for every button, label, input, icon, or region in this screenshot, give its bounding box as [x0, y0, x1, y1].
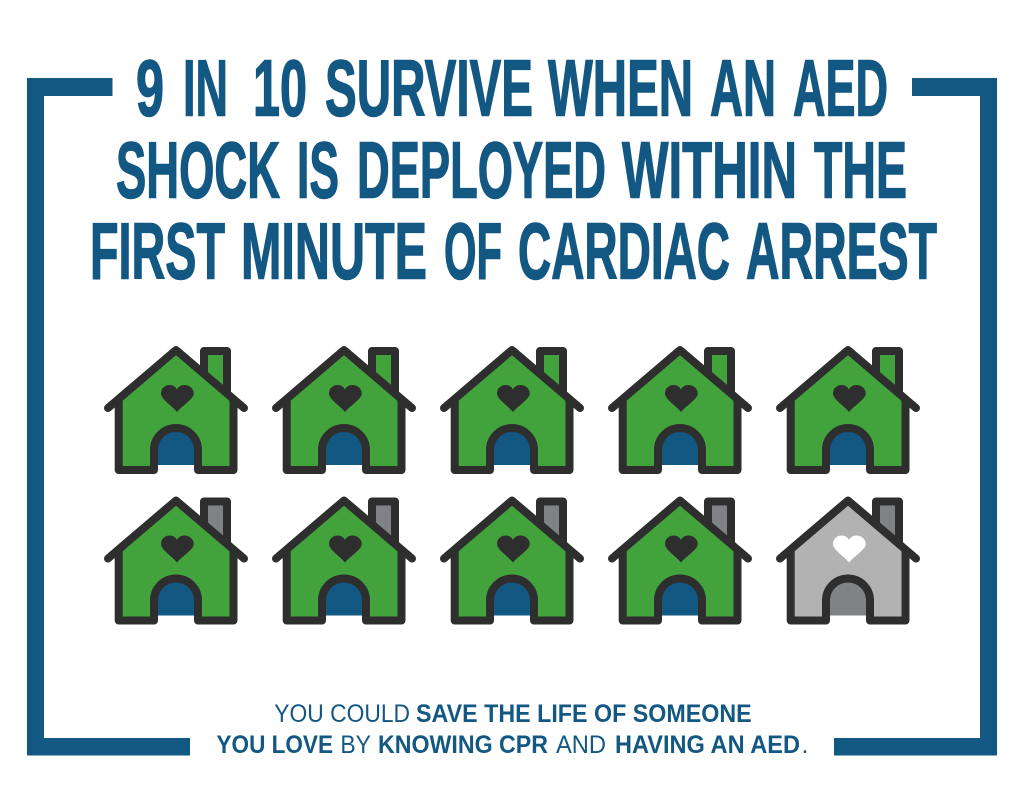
- title: DEPLOYED: [357, 126, 606, 214]
- title: IN: [183, 44, 228, 132]
- title: THE: [814, 126, 907, 214]
- house 8: survivor with gray chimney: [444, 500, 580, 620]
- footer message: BY: [340, 731, 371, 759]
- house 6: survivor with gray chimney: [108, 500, 244, 620]
- title: AED: [793, 44, 888, 132]
- title: SHOCK: [116, 126, 280, 214]
- house 3: survivor: [444, 350, 580, 470]
- title: OF: [444, 206, 502, 296]
- house 4: survivor: [612, 350, 748, 470]
- title: 9: [136, 44, 164, 132]
- footer message: YOU LOVE: [216, 731, 333, 759]
- footer message: AND: [556, 731, 606, 759]
- footer message: .: [802, 731, 808, 759]
- house 7: survivor with gray chimney: [276, 500, 412, 620]
- house 2: survivor: [276, 350, 412, 470]
- title: SURVIVE: [325, 44, 533, 132]
- footer message: HAVING AN AED: [615, 731, 800, 759]
- title: WHEN: [548, 44, 693, 132]
- footer message: KNOWING CPR: [378, 731, 548, 759]
- title: [90, 44, 937, 296]
- title: WITHIN: [622, 126, 797, 214]
- title: AN: [710, 44, 776, 132]
- footer message: SAVE THE LIFE OF SOMEONE: [416, 700, 752, 728]
- title: FIRST: [90, 206, 225, 296]
- house 10: gray non-survivor with white heart: [780, 500, 916, 620]
- title: 10: [253, 44, 307, 132]
- house 9: survivor with gray chimney: [612, 500, 748, 620]
- title: IS: [297, 126, 339, 214]
- footer message: YOU COULD: [274, 700, 410, 728]
- title: CARDIAC: [518, 206, 730, 296]
- house icon grid: [108, 350, 916, 620]
- title: MINUTE: [241, 206, 427, 296]
- house 5: survivor: [780, 350, 916, 470]
- footer message: [216, 700, 808, 759]
- house 1: survivor: [108, 350, 244, 470]
